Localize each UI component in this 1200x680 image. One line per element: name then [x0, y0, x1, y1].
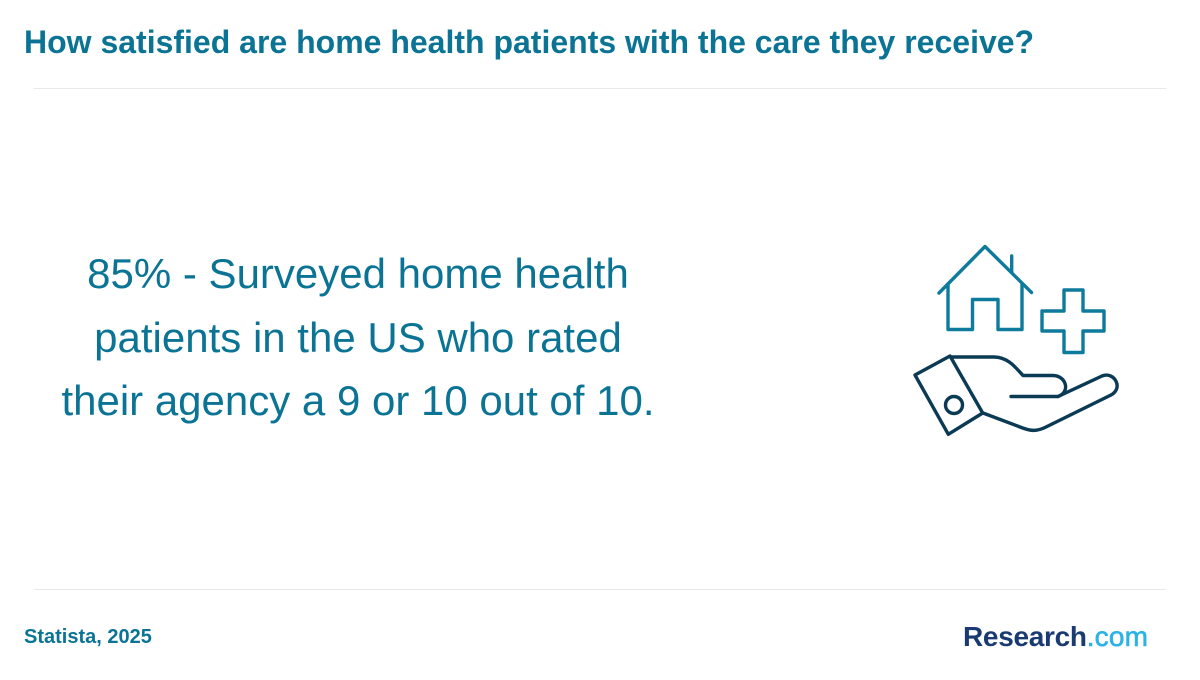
main statistic text: their agency a 9 or 10 out of 10.: [61, 377, 655, 424]
logo: Research.com: [963, 621, 1148, 652]
title: How satisfied are home health patients with the care they receive?: [24, 24, 1034, 60]
icon: house: [939, 246, 1032, 330]
main statistic text: patients in the US who rated: [94, 314, 622, 360]
main statistic text: [61, 250, 655, 424]
icon: hand holding home and medical cross: [913, 244, 1119, 436]
source: Statista, 2025: [24, 626, 152, 648]
icon: hand: [915, 356, 1117, 434]
main statistic text: 85% - Surveyed home health: [87, 250, 629, 297]
icon: medical cross: [1042, 290, 1104, 352]
